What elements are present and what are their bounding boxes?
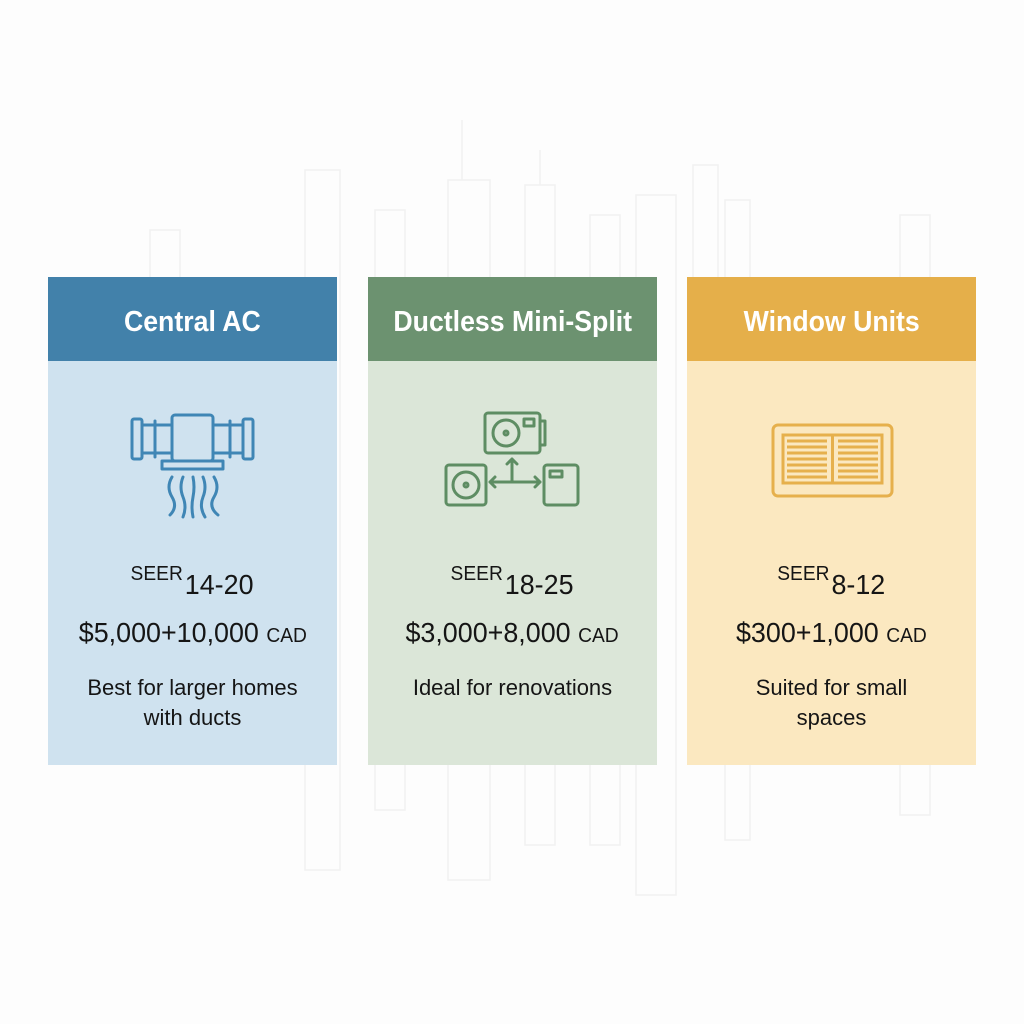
card: Window Units: SEER8-12	[777, 563, 885, 600]
card: Ductless Mini-Split	[368, 277, 657, 765]
icon: duct unit	[130, 414, 254, 519]
heading: Central AC	[48, 277, 337, 361]
card: Central AC	[48, 277, 337, 765]
card: Ductless Mini-Split: $3,000+8,000 CAD	[406, 617, 619, 648]
icon: mini-split units	[444, 412, 580, 506]
card: Window Units	[687, 277, 976, 765]
card: Window Units: spaces	[797, 705, 866, 730]
heading: Window Units	[687, 277, 976, 361]
heading: Ductless Mini-Split	[368, 277, 657, 361]
card: Central AC: $5,000+10,000 CAD	[78, 617, 307, 648]
card: Window Units: $300+1,000 CAD	[736, 617, 927, 648]
card: Central AC: with ducts	[144, 705, 241, 730]
heading: Central AC: Central AC	[124, 306, 261, 338]
heading: Window Units: Window Units	[743, 306, 920, 338]
card: Window Units: Suited for small	[756, 675, 907, 700]
heading: Ductless Mini-Split: Ductless Mini-Split	[393, 306, 632, 338]
card: Ductless Mini-Split: SEER18-25	[451, 563, 574, 600]
card: Ductless Mini-Split: Ideal for renovations	[413, 675, 612, 700]
card: Central AC: Best for larger homes	[87, 675, 298, 700]
card: Central AC: SEER14-20	[131, 563, 254, 600]
icon: window unit	[772, 424, 894, 498]
